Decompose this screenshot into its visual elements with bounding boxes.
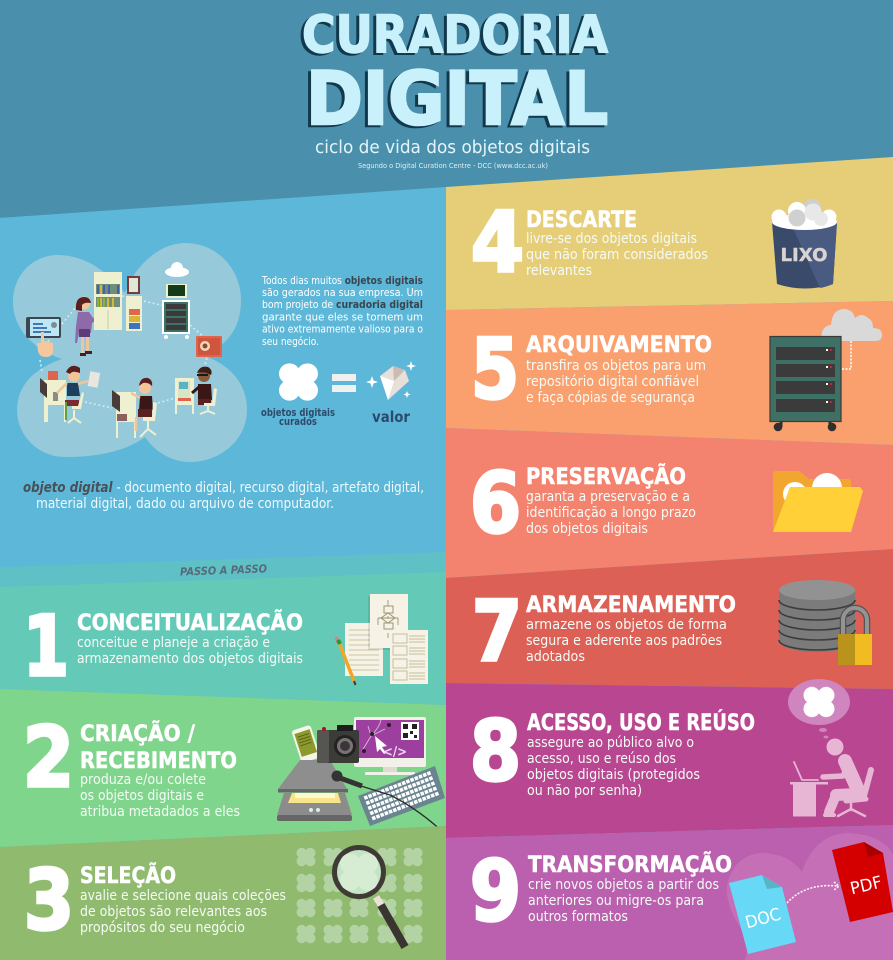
heading: ARMAZENAMENTO — [526, 593, 736, 618]
label: curated objects: objetos digitais — [261, 407, 335, 419]
icon: documents and pencil — [336, 594, 428, 685]
number 7: 7 — [472, 583, 522, 680]
title — [302, 6, 608, 142]
label: curated objects — [261, 407, 335, 428]
panel: step 5 archiving — [446, 301, 893, 445]
description: acesso, uso e reúso dos — [527, 751, 676, 767]
shelves and drawers — [94, 272, 142, 331]
panel: step 4 disposal — [446, 157, 893, 310]
description: crie novos objetos a partir dos — [528, 877, 719, 893]
panel: step 6 preservation — [446, 428, 893, 578]
description: avalie e selecione quais coleções — [80, 888, 286, 904]
panel: step 9 transformation — [446, 825, 893, 960]
scanner — [277, 760, 352, 821]
description — [528, 877, 719, 925]
document DOC — [729, 875, 796, 954]
description — [526, 489, 696, 537]
dotted arrow — [787, 882, 839, 903]
description: livre-se dos objetos digitais — [526, 231, 697, 247]
description: dos objetos digitais — [526, 521, 648, 537]
panel: step 3 selection — [0, 826, 446, 960]
panel: step 2 creation — [0, 689, 446, 847]
description — [80, 772, 240, 820]
number 8: 8 — [470, 703, 521, 800]
description: e faça cópias de segurança — [526, 390, 695, 406]
employee at desk centre — [112, 378, 157, 438]
document PDF — [832, 842, 893, 922]
description: transfira os objetos para um — [526, 358, 706, 374]
intro paragraph: são gerados na sua empresa. Um — [262, 286, 423, 299]
employee at desk left — [40, 366, 100, 423]
monitor — [354, 717, 426, 775]
equals sign — [332, 374, 356, 392]
intro paragraph: garante que eles se tornem um — [262, 310, 423, 324]
description: os objetos digitais e — [80, 788, 204, 804]
description: armazene os objetos de forma — [526, 617, 727, 633]
safe — [196, 336, 222, 357]
panel: step by step banner — [0, 552, 446, 587]
icon: server rack with cloud — [770, 309, 882, 431]
intro paragraph: bom projeto de curadoria digital — [262, 298, 423, 311]
description: identificação a longo prazo — [526, 505, 696, 521]
description: que não foram considerados — [526, 247, 708, 263]
number 3: 3 — [24, 852, 74, 949]
heading: CONCEITUALIZAÇÃO — [77, 610, 303, 636]
description: propósitos do seu negócio — [80, 920, 245, 936]
number 5: 5 — [471, 321, 519, 418]
icon: trash bin — [772, 199, 837, 288]
intro paragraph: ativo extremamente valioso para o — [262, 322, 423, 336]
description: repositório digital confiável — [526, 374, 699, 390]
icon: curated objects clover — [279, 363, 318, 401]
description — [526, 231, 708, 279]
intro paragraph — [261, 274, 423, 348]
title: DIGITAL — [306, 57, 608, 142]
description: adotados — [526, 649, 585, 665]
subtitle: ciclo de vida dos objetos digitais — [315, 137, 590, 158]
description: de objetos são relevantes aos — [80, 904, 267, 920]
icon: grid of objects — [296, 848, 422, 943]
server with cloud — [162, 262, 190, 339]
icon: magnifying glass — [334, 848, 405, 947]
icon: person thinking at computer — [788, 679, 871, 816]
illustration: capture devices — [277, 717, 446, 835]
icon: trash bin: LIXO — [780, 245, 828, 266]
heading: RECEBIMENTO — [80, 749, 237, 774]
description: assegure ao público alvo o — [527, 735, 694, 751]
number 4: 4 — [471, 194, 524, 291]
microphone — [332, 770, 446, 835]
monitor: </> — [383, 745, 407, 760]
number 1: 1 — [23, 598, 69, 695]
description — [526, 358, 706, 406]
heading: ACESSO, USO E REÚSO — [527, 710, 755, 736]
description: anteriores ou migre-os para — [528, 893, 704, 909]
illustration: digital curation cycle — [13, 243, 247, 462]
icon: open folder — [773, 471, 863, 532]
panel: header — [0, 0, 893, 218]
heading: DESCARTE — [526, 208, 637, 233]
description: relevantes — [526, 263, 592, 279]
label: value: valor — [372, 408, 411, 426]
camera — [317, 725, 359, 763]
heading — [80, 721, 237, 774]
definition of digital object: objeto digital - documento digital, recurso digital, artefato digital, — [23, 480, 424, 496]
standing woman — [75, 296, 102, 356]
banner label: PASSO A PASSO — [180, 562, 267, 579]
heading: SELEÇÃO — [80, 863, 176, 889]
panel: step 8 access and reuse — [446, 679, 893, 838]
description: outros formatos — [528, 909, 628, 925]
heading: ARQUIVAMENTO — [526, 333, 712, 358]
heading: TRANSFORMAÇÃO — [528, 852, 732, 878]
panel: introduction — [0, 187, 446, 567]
icon: database with padlock — [779, 580, 872, 665]
description: segura e aderente aos padrões — [526, 633, 722, 649]
smartphone — [291, 725, 321, 763]
definition of digital object — [23, 480, 424, 512]
description — [77, 635, 303, 667]
keyboard — [358, 766, 445, 826]
description: atribua metadados a eles — [80, 804, 240, 820]
icon: DOC to PDF conversion — [727, 833, 893, 960]
description — [80, 888, 286, 936]
description: ou não por senha) — [527, 783, 642, 799]
description: armazenamento dos objetos digitais — [77, 651, 303, 667]
description: objetos digitais (protegidos — [527, 767, 700, 783]
definition of digital object: material digital, dado ou arquivo de computador. — [36, 496, 334, 512]
description: garanta a preservação e a — [526, 489, 690, 505]
intro paragraph: seu negócio. — [262, 335, 319, 348]
label: curated objects: curados — [279, 416, 317, 428]
description — [527, 735, 700, 799]
title: CURADORIA — [302, 6, 608, 66]
panel: step 7 storage — [446, 549, 893, 689]
heading: CRIAÇÃO / — [80, 721, 196, 747]
source note: Segundo o Digital Curation Centre - DCC (www.dcc.ac.uk) — [358, 162, 548, 170]
employee at desk right — [175, 367, 217, 414]
heading: PRESERVAÇÃO — [526, 464, 686, 490]
document PDF: PDF — [848, 873, 884, 899]
panel: step 1 conceptualization — [0, 572, 446, 705]
intro paragraph: Todos dias muitos objetos digitais — [261, 274, 423, 287]
description — [526, 617, 727, 665]
document DOC: DOC — [743, 905, 783, 933]
number 2: 2 — [23, 709, 74, 806]
description: produza e/ou colete — [80, 772, 206, 788]
number 6: 6 — [470, 455, 521, 552]
icon: diamond with sparkles — [366, 361, 416, 400]
number 9: 9 — [470, 843, 521, 940]
tablet and hand — [26, 317, 61, 357]
description: conceitue e planeje a criação e — [77, 635, 270, 651]
